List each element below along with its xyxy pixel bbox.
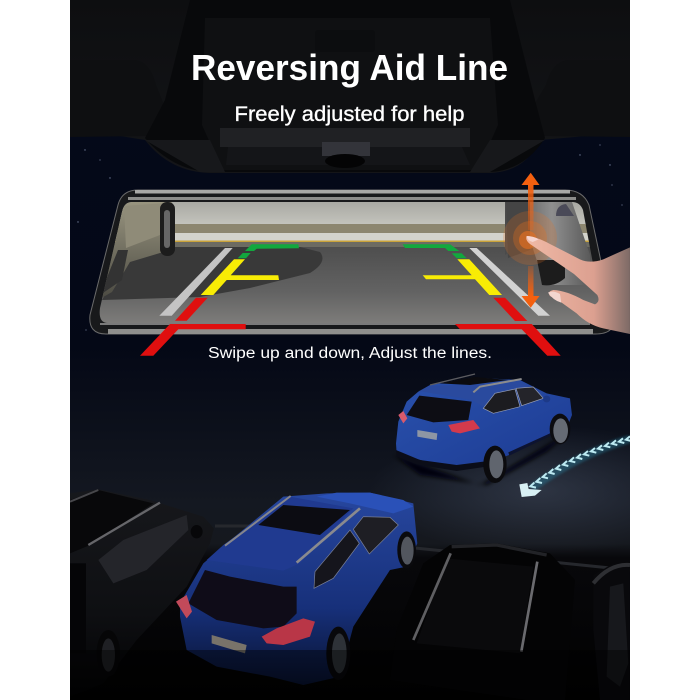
wheel bbox=[97, 630, 120, 677]
front hub bbox=[553, 418, 568, 443]
icon: up and down arrow bbox=[522, 173, 540, 308]
car shadow bbox=[393, 432, 570, 485]
dark roof bbox=[70, 490, 153, 553]
car interior roof bbox=[70, 0, 630, 173]
side window rear bbox=[314, 530, 359, 588]
ground light glow bbox=[410, 440, 630, 540]
left green top guide bbox=[245, 244, 299, 251]
right yellow guide bbox=[423, 259, 502, 295]
rear hub bbox=[489, 450, 503, 478]
windshield glare bbox=[417, 558, 533, 653]
right sun visor bbox=[586, 136, 618, 137]
roof highlight bbox=[452, 545, 547, 555]
rear window bbox=[188, 570, 297, 628]
rail near bbox=[297, 508, 360, 563]
car shadow on ground bbox=[102, 247, 322, 300]
rear window bbox=[407, 396, 472, 422]
rear wheel bbox=[326, 627, 350, 680]
stars bbox=[77, 144, 623, 331]
rail left bbox=[413, 553, 451, 640]
frame bottom highlight bbox=[108, 329, 593, 334]
lower bumper bbox=[396, 450, 487, 471]
side window front bbox=[516, 387, 543, 406]
panoramic roof bbox=[439, 377, 508, 385]
front wheel bbox=[397, 531, 416, 569]
rail near bbox=[88, 503, 160, 545]
right red guide bbox=[455, 324, 561, 356]
side mirror bbox=[191, 525, 203, 538]
left sun visor bbox=[82, 136, 112, 137]
black car bottom right bbox=[390, 543, 575, 700]
hub bbox=[102, 638, 115, 672]
tail light right bbox=[448, 420, 480, 433]
sunroof bbox=[258, 505, 350, 535]
rear wheel bbox=[483, 446, 507, 483]
rail far bbox=[225, 496, 291, 546]
right green small guide bbox=[452, 253, 467, 258]
roof bbox=[419, 381, 543, 407]
blue SUV parked bbox=[176, 493, 417, 685]
roof rail far bbox=[430, 374, 475, 385]
car body bbox=[396, 378, 572, 470]
left green small guide bbox=[238, 253, 251, 258]
guidance chevron trail bbox=[519, 436, 631, 497]
number plate bbox=[417, 430, 437, 440]
right red upper guide bbox=[493, 298, 527, 321]
reflected right car bbox=[505, 202, 590, 285]
car trim bbox=[593, 565, 630, 583]
side window rear bbox=[483, 389, 520, 413]
mirror screen image bbox=[95, 202, 615, 323]
black car left bbox=[70, 489, 214, 697]
instruction caption: Swipe up and down, Adjust the lines. bbox=[208, 345, 492, 362]
side windows bbox=[98, 515, 188, 583]
mirror bottom band bbox=[100, 323, 590, 325]
trail glow bbox=[532, 439, 630, 488]
left yellow guide bbox=[201, 259, 279, 295]
roof bbox=[207, 497, 353, 571]
car window bbox=[607, 583, 628, 687]
photo scene bbox=[70, 0, 630, 700]
large chevron bbox=[519, 483, 542, 497]
asphalt ground bbox=[70, 345, 630, 700]
overhead console bbox=[145, 54, 545, 172]
parking line right bbox=[469, 248, 550, 316]
fingernail top bbox=[527, 236, 539, 242]
mirror frame bbox=[90, 190, 613, 334]
parking bay lines bbox=[215, 526, 630, 570]
frame top highlight bbox=[135, 190, 570, 194]
reversing guide lines bbox=[140, 244, 561, 356]
rail right bbox=[521, 562, 537, 652]
hand pointing bbox=[526, 236, 630, 334]
rear dark bbox=[70, 563, 86, 653]
left red guide bbox=[140, 324, 246, 356]
sill trim bbox=[508, 433, 551, 456]
side window front bbox=[353, 517, 398, 554]
number plate bbox=[212, 635, 247, 653]
mirror bbox=[543, 396, 550, 402]
infographic canvas bbox=[70, 0, 630, 700]
bottom vignette bbox=[70, 650, 630, 700]
front hub bbox=[401, 537, 414, 565]
tail light left bbox=[398, 411, 407, 423]
rear hub bbox=[332, 633, 347, 673]
night sky background bbox=[70, 136, 630, 345]
subtitle: Freely adjusted for help bbox=[234, 103, 464, 126]
left red upper guide bbox=[175, 298, 208, 321]
parking line left bbox=[159, 248, 233, 316]
black car far right bbox=[593, 563, 630, 700]
right green top guide bbox=[403, 244, 459, 251]
tail light right bbox=[262, 618, 315, 645]
title: Reversing Aid Line bbox=[191, 47, 508, 88]
blue SUV reversing bbox=[393, 374, 572, 485]
body bbox=[180, 493, 417, 685]
tail light left bbox=[176, 595, 192, 618]
roof rail near bbox=[473, 379, 522, 392]
fingernail thumb bbox=[548, 292, 561, 303]
rearview mirror bbox=[90, 190, 615, 334]
spoiler bbox=[317, 493, 413, 513]
reflected left car bbox=[98, 202, 175, 300]
frame inner highlight bbox=[128, 197, 576, 200]
touch ripple bbox=[503, 211, 557, 265]
rail far bbox=[70, 490, 98, 502]
front wheel bbox=[550, 414, 570, 444]
